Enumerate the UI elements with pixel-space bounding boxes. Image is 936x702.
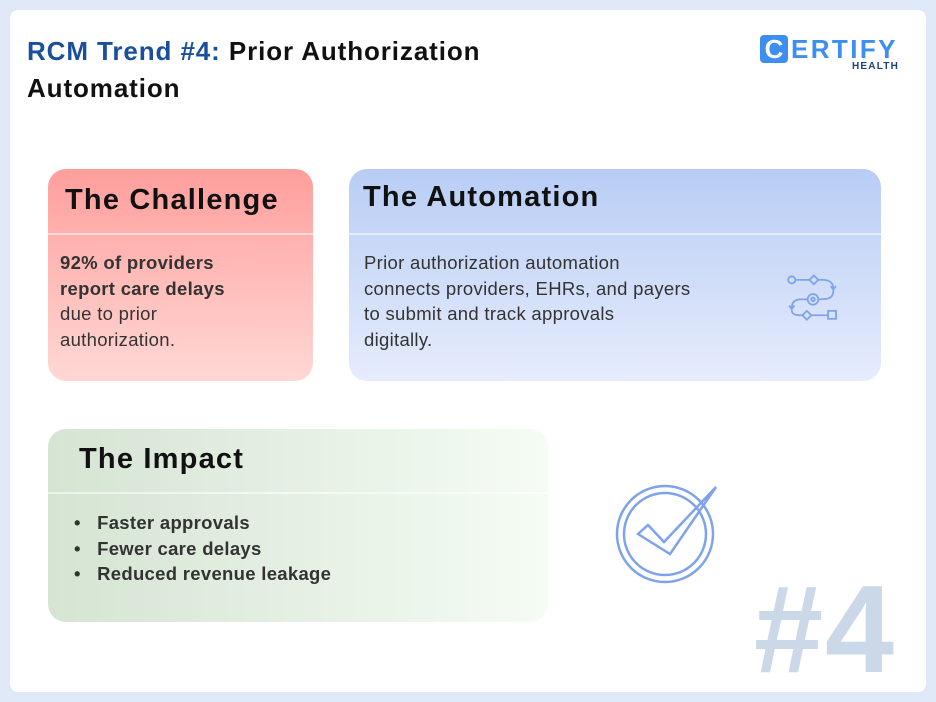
text: automation description: connects providers, EHRs, and payers <box>364 278 690 298</box>
text: challenge stat <box>60 252 225 350</box>
title: RCM Trend #4: Prior Authorization <box>27 36 480 66</box>
text: automation description: digitally. <box>364 328 432 350</box>
icon: check circle <box>616 484 717 584</box>
heading: the challenge: The Challenge <box>65 184 279 216</box>
heading: the automation: The Automation <box>363 181 599 213</box>
logo: ERTIFY <box>791 34 898 64</box>
text: challenge stat: due to prior <box>60 303 157 324</box>
text: challenge stat: report care delays <box>60 278 225 298</box>
list: impact bullets: • Faster approvals <box>74 512 250 533</box>
text: automation description: to submit and track approvals <box>364 303 614 324</box>
list: impact bullets: • Reduced revenue leakage <box>74 563 331 584</box>
text: automation description <box>364 252 690 350</box>
panel: impact <box>48 429 548 622</box>
text: automation description: Prior authorization automation <box>364 252 620 273</box>
panel: challenge <box>48 169 313 381</box>
list: impact bullets <box>74 512 331 584</box>
big number #4: #4 <box>754 561 896 699</box>
panel: automation <box>349 169 881 381</box>
heading: the impact: The Impact <box>79 443 244 475</box>
logo: C <box>765 34 783 64</box>
list: impact bullets: • Fewer care delays <box>74 538 262 558</box>
text: challenge stat: authorization. <box>60 328 175 350</box>
title <box>27 36 480 103</box>
icon: workflow <box>787 274 837 321</box>
logo: HEALTH <box>852 61 899 72</box>
title: Automation <box>27 73 180 103</box>
text: challenge stat: 92% of providers <box>60 252 214 273</box>
logo <box>760 34 899 72</box>
